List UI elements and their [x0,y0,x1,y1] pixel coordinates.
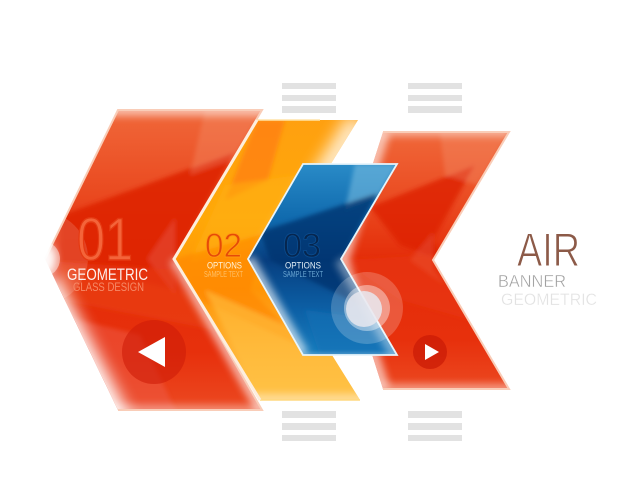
text: number 03: 03 [283,227,321,265]
text: sample text 02: SAMPLE TEXT [204,270,243,279]
text: banner: BANNER [498,271,566,291]
text: geometric: GEOMETRIC [501,290,597,309]
icon: left edge glow circle [16,239,60,279]
text: AIR: AIR [517,223,580,276]
placeholder lines: top right [408,83,462,113]
placeholder lines: top left [282,83,336,113]
text: number 02: 02 [205,227,242,265]
icon: large target circle [331,272,403,344]
icon: right play button [413,335,447,369]
text: geometric: GEOMETRIC [67,265,148,284]
placeholder lines: bottom left [282,411,336,441]
placeholder lines: bottom right [408,411,462,441]
text: options 03: OPTIONS [285,260,321,272]
panel: right red chevron [340,124,515,394]
icon: left play button [122,320,186,384]
text: number 01: 01 [77,206,133,273]
panel: orange chevron [170,118,370,404]
text: options 02: OPTIONS [207,260,242,272]
panel: left red chevron [48,109,264,411]
text: sample text 03: SAMPLE TEXT [283,270,323,279]
text: glass design: GLASS DESIGN [73,282,144,294]
panel: blue chevron [245,162,400,358]
